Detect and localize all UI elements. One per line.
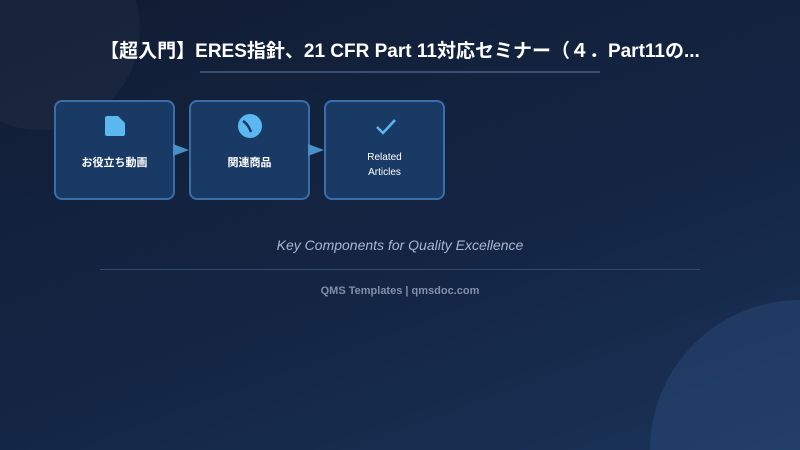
panel: products [189, 100, 310, 200]
panel: articles: Related [367, 152, 402, 163]
panel: products: 関連商品 [228, 157, 272, 169]
icon: globe [238, 114, 262, 138]
icon: document [105, 116, 125, 136]
title: 【超入門】ERES指針、21 CFR Part 11対応セミナー（４．Part11の... [100, 41, 700, 62]
panel: articles [324, 100, 445, 200]
panel: videos [54, 100, 175, 200]
icon: check [376, 119, 396, 135]
subtitle: Key Components for Quality Excellence [277, 237, 523, 253]
arrow [173, 144, 189, 156]
footer: QMS Templates | qmsdoc.com [321, 285, 479, 297]
panel: articles: Articles [368, 167, 401, 178]
panel: videos: お役立ち動画 [82, 157, 148, 169]
arrow [308, 144, 324, 156]
